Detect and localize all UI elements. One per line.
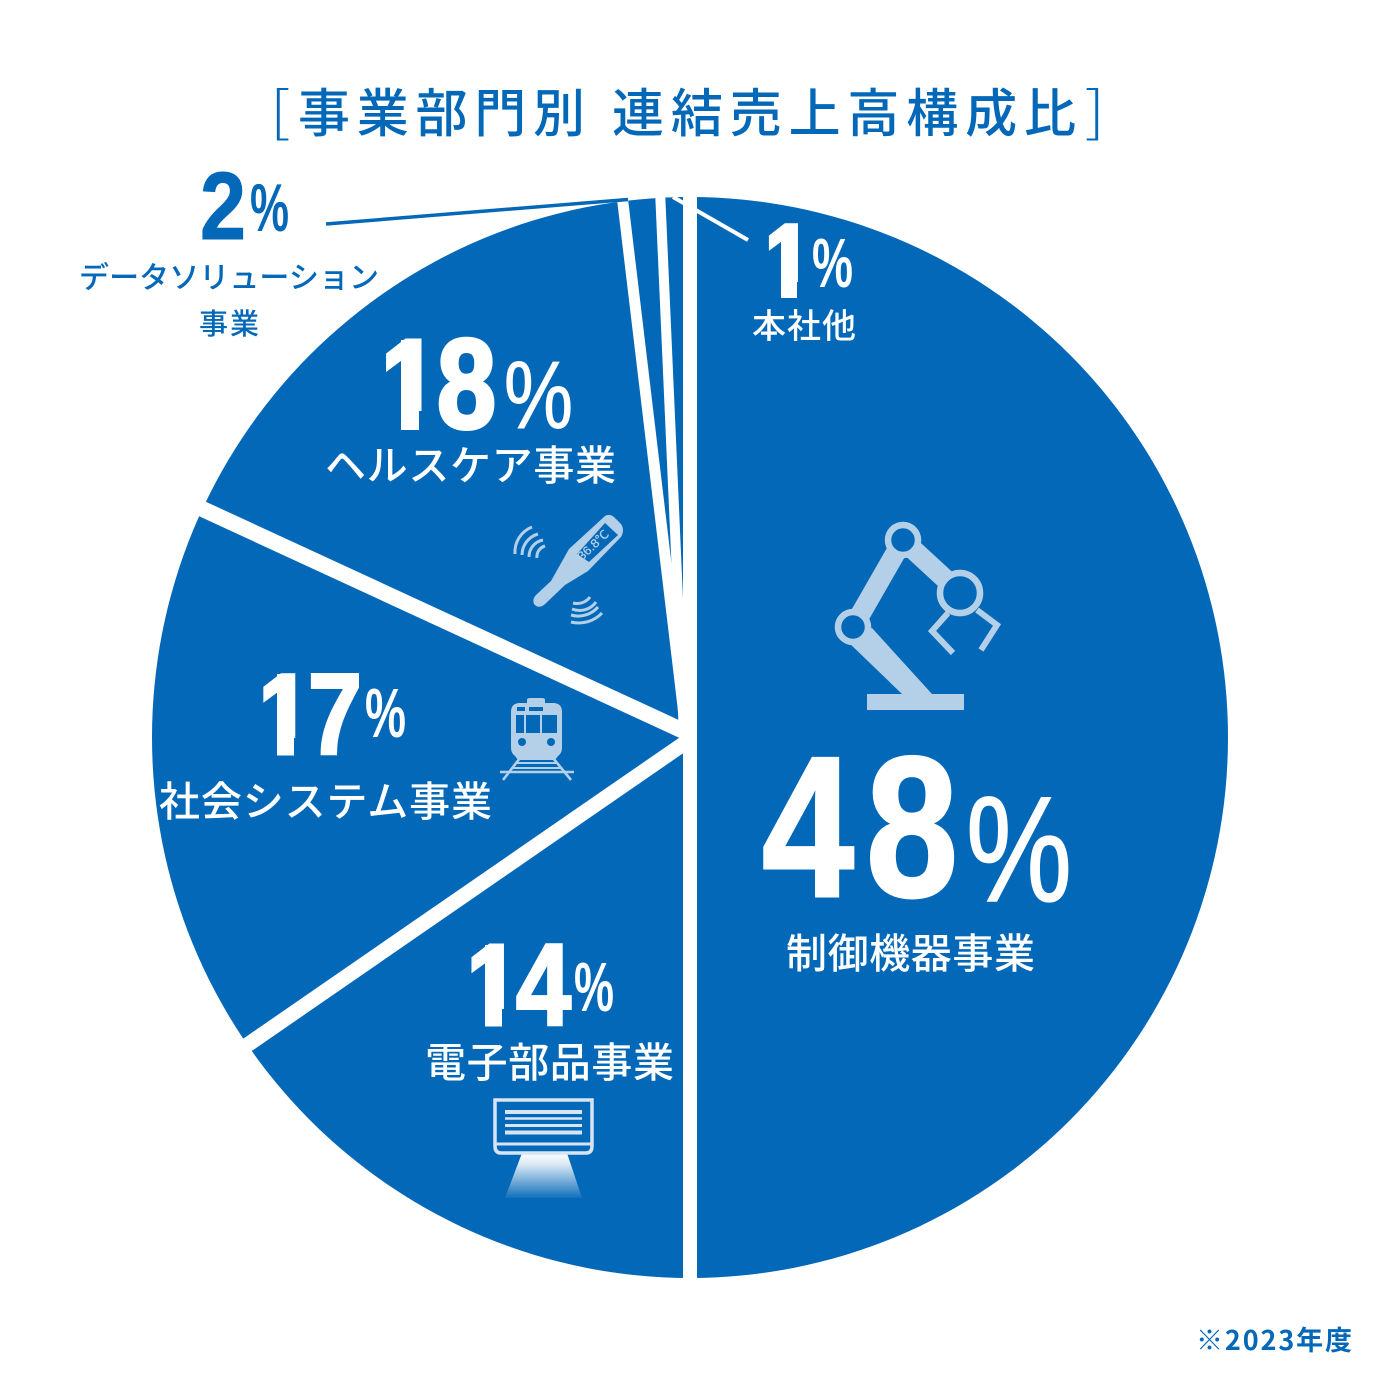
label: 制御機器事業 48%: % — [966, 765, 1072, 933]
label: 社会システム事業 17% — [159, 651, 492, 828]
label: 本社他 1%: 1 — [764, 203, 812, 318]
label: ヘルスケア事業 18%: ヘルスケア事業 — [325, 432, 616, 492]
label: ヘルスケア事業 18% — [325, 313, 616, 492]
title: [ — [270, 67, 290, 147]
footnote: ※2023年度 — [1196, 1319, 1352, 1358]
leader line: 本社他 — [673, 197, 748, 240]
label: ヘルスケア事業 18%: 1 — [380, 313, 440, 455]
label: 電子部品事業 14%: 1 — [466, 920, 521, 1050]
label: 電子部品事業 14% — [425, 920, 674, 1089]
label: 制御機器事業 48%: 8 — [866, 716, 958, 939]
icon: air conditioner — [495, 1100, 592, 1198]
label: 電子部品事業 14%: 4 — [516, 920, 571, 1050]
label: 社会システム事業 17%: 社会システム事業 — [159, 768, 492, 828]
label: データソリューション事業 2%: % — [250, 170, 289, 246]
label: データソリューション事業 2%: 事業 — [199, 301, 259, 343]
pie disc — [152, 197, 1228, 1278]
title: ] — [1085, 67, 1105, 147]
label: 本社他 1% — [752, 203, 856, 348]
label: 電子部品事業 14%: % — [574, 948, 614, 1026]
label: 本社他 1%: % — [812, 224, 853, 302]
icon: train — [500, 698, 574, 780]
label: データソリューション事業 2%: 2 — [200, 153, 246, 260]
label: 本社他 1%: 本社他 — [752, 299, 856, 348]
label: 制御機器事業 48%: 制御機器事業 — [786, 920, 1035, 980]
label: ヘルスケア事業 18%: 8 — [437, 313, 496, 455]
label: 社会システム事業 17%: 7 — [308, 651, 362, 779]
label: 制御機器事業 48%: 4 — [762, 716, 854, 939]
leader line: データソリューション事業 — [326, 190, 628, 224]
label: 社会システム事業 17%: 1 — [258, 651, 312, 779]
title — [270, 67, 1105, 147]
label: 制御機器事業 48% — [762, 716, 1072, 980]
label: 電子部品事業 14%: 電子部品事業 — [425, 1029, 674, 1089]
icon: thermometer: 36.8℃ — [574, 527, 612, 563]
pie chart — [152, 190, 1228, 1285]
icon: thermometer — [515, 515, 623, 623]
label: ヘルスケア事業 18%: % — [504, 342, 573, 449]
title: 事業部門別 — [298, 72, 585, 147]
slice separators — [196, 190, 692, 1285]
label: データソリューション事業 2%: データソリューション — [79, 253, 379, 297]
title: 連結売上高構成比 — [612, 72, 1076, 147]
label: 社会システム事業 17%: % — [365, 674, 406, 752]
icon: robot arm — [838, 525, 997, 710]
label: データソリューション事業 2% — [79, 153, 379, 343]
